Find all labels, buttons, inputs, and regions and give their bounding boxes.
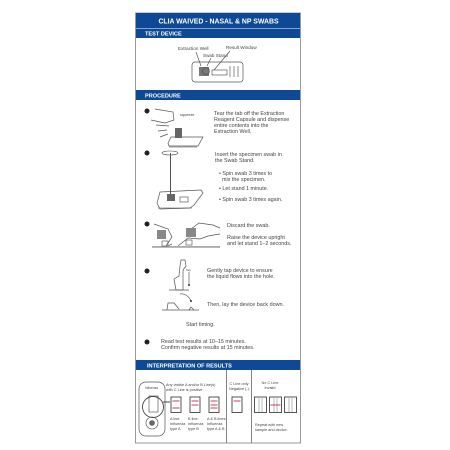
step 2 text: mix the specimen. [222,177,265,183]
step 2 text: • Spin swab 3 times again. [219,197,282,203]
positive results: type A [170,427,181,431]
step 2 illustration [144,150,203,209]
title [136,13,300,28]
step 3 illustration [144,222,220,248]
step 4 text: Gently tap device to ensure [207,268,273,274]
invalid results: Repeat with new [255,423,283,427]
step 5 [144,339,254,351]
step 1 text: Extraction Well. [214,129,251,135]
step 2 text: • Let stand 1 minute. [219,186,268,192]
positive results: Influenza [170,422,186,426]
step 2 text: Insert the specimen swab in [215,152,282,158]
invalid results: sample and device. [255,428,288,432]
step 1 text: Tear the tab off the Extraction [214,111,284,117]
step 1 text [214,111,289,135]
heading: test device: TEST DEVICE [145,32,182,38]
step 4 illustration: Tap [186,268,191,272]
step 4 text: the liquid flows into the hole. [207,274,275,280]
panel: instruction card [136,13,300,443]
step 2 text: the Swab Stand. [215,158,255,164]
invalid results [254,381,296,432]
heading: test device [136,28,300,38]
positive results: Influenza [207,422,223,426]
device closeup: Influenza [145,386,158,390]
step 2 text: • Spin swab 3 times to [219,171,272,177]
step 1 text: Reagent Capsule and dispense [214,117,289,123]
diagram: test device: Result Window [226,45,257,50]
step 3 text [227,223,291,247]
column dividers [226,370,252,443]
negative result [229,382,250,412]
step 4 illustration [144,260,199,310]
heading: interpretation of results: INTERPRETATION OF RESULTS [147,364,232,370]
positive results: A line: [170,417,180,421]
positive results [166,383,226,431]
invalid results: No C Line [262,381,278,385]
positive results: A & B lines: [207,417,226,421]
start timing: Start timing. [186,322,215,328]
positive results: B line: [188,417,199,421]
device closeup [139,382,170,436]
diagram: test device: Swab Stand [203,53,228,58]
heading: procedure [136,90,300,100]
step 3 text: and let stand 1–2 seconds. [227,241,291,247]
diagram: test device: Extraction Well [178,46,209,51]
step 2 text [215,152,282,203]
positive results: type A & B [207,427,225,431]
positive results: type B [188,427,199,431]
step 1 illustration: squeeze [180,113,194,117]
invalid results: Invalid [265,386,275,390]
step 3 text: Discard the swab. [227,223,270,229]
heading: interpretation of results [136,360,300,370]
title: CLIA WAIVED - NASAL & NP SWABS [158,18,279,26]
positive results: Influenza [188,422,204,426]
step 5: Confirm negative results at 15 minutes. [161,345,254,351]
positive results: with C Line is positive. [166,388,204,392]
heading: procedure: PROCEDURE [145,94,181,100]
step 4 text: Then, lay the device back down. [207,302,284,308]
positive results: Any visible A and/or B Line(s) [166,383,216,387]
step 5: Read test results at 10–15 minutes. [161,339,246,345]
diagram: test device [178,45,257,82]
step 1 illustration [144,108,203,147]
step 3 text: Raise the device upright [227,235,285,241]
step 4 text [207,268,284,308]
negative result: C Line only [230,382,249,386]
negative result: Negative (-) [229,387,250,391]
step 1 text: entire contents into the [214,123,269,129]
